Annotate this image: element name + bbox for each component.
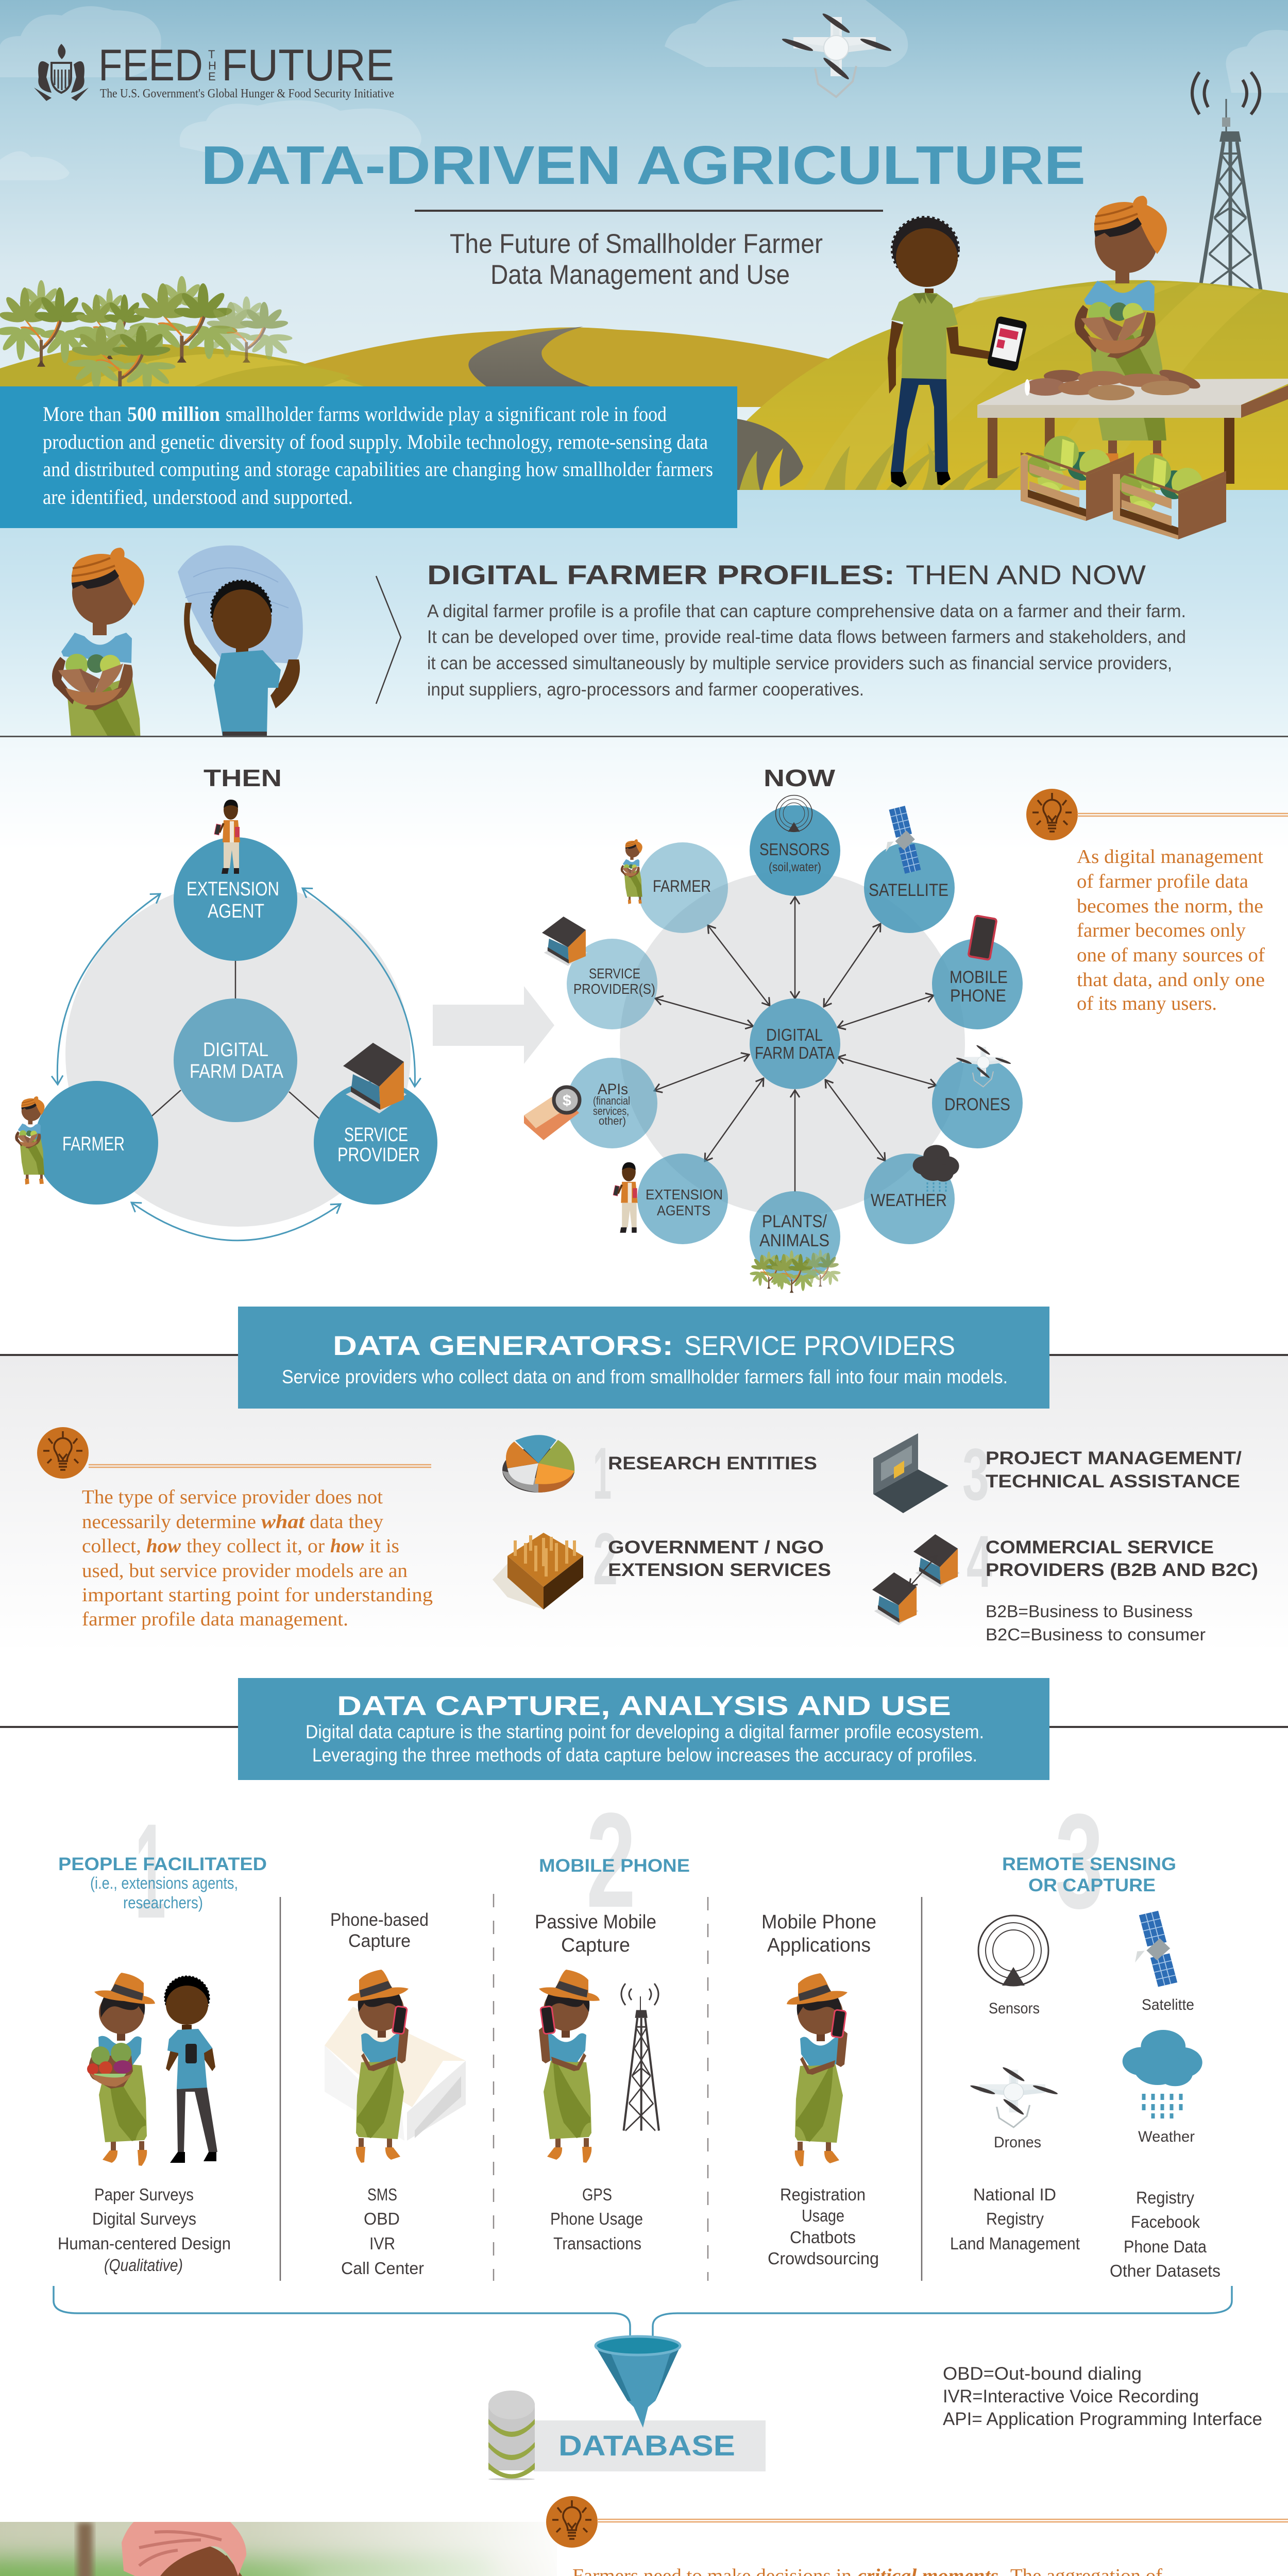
node: extension agent: AGENT bbox=[208, 901, 264, 922]
icon: sensors bbox=[978, 1916, 1048, 2017]
wordmark: FUTURE bbox=[222, 41, 394, 90]
node: satellite bbox=[864, 805, 955, 933]
list: remote sensing one: Registry bbox=[986, 2209, 1044, 2228]
banner: data capture: Leveraging the three methods of data capture below increases the accuracy of profiles. bbox=[312, 1744, 977, 1766]
text: abbreviations: API= Application Programming Interface bbox=[943, 2409, 1262, 2429]
node: digital farm data bbox=[174, 998, 297, 1122]
callout: type of service provider: farmer profile data management. bbox=[82, 1608, 348, 1630]
list: passive mobile capture: Transactions bbox=[553, 2234, 641, 2253]
node: farmer: FARMER bbox=[62, 1133, 125, 1155]
node: APIs: services, bbox=[593, 1105, 629, 1117]
panel: now diagram bbox=[524, 765, 1023, 1293]
subtitle: The Future of Smallholder Farmer bbox=[450, 229, 823, 259]
list: remote sensing two: Facebook bbox=[1131, 2212, 1200, 2231]
icon: drone bbox=[781, 12, 892, 97]
list: people facilitated: Paper Surveys bbox=[94, 2185, 194, 2204]
big numerals: 2 bbox=[586, 1785, 636, 1936]
list: passive mobile capture: GPS bbox=[582, 2185, 612, 2204]
node: sensors: (soil,water) bbox=[769, 860, 821, 874]
icon: light bulb bbox=[1026, 789, 1078, 840]
icon: funnel bbox=[596, 2336, 680, 2428]
column dividers bbox=[280, 1894, 922, 2281]
text: digital farmer profile definition: A digital farmer profile is a profile that can capture comprehensive data on a farmer and their farm. bbox=[427, 601, 1186, 621]
icon: weather: Weather bbox=[1138, 2128, 1195, 2145]
list: mobile phone applications: Crowdsourcing bbox=[768, 2249, 879, 2268]
node: drones bbox=[932, 1044, 1023, 1148]
item: commercial service providers: B2B=Business to Business bbox=[986, 1602, 1193, 1621]
node: extension agents: EXTENSION bbox=[646, 1187, 723, 1202]
node: extension agents: AGENTS bbox=[657, 1202, 710, 1218]
list: remote sensing two bbox=[1110, 2188, 1221, 2280]
panel: intro text: production and genetic diversity of food supply. Mobile technology, remote-sensing data bbox=[43, 430, 708, 453]
heading: now: NOW bbox=[764, 765, 836, 791]
node: mobile phone: MOBILE bbox=[950, 968, 1008, 987]
panel: intro text bbox=[0, 386, 737, 528]
list: phone-based capture: SMS bbox=[367, 2185, 397, 2204]
subheads: Phone-based bbox=[330, 1910, 429, 1930]
text: abbreviations: OBD=Out-bound dialing bbox=[943, 2364, 1142, 2384]
column heading: people facilitated: (i.e., extensions agents, bbox=[90, 1874, 238, 1892]
column heading: people facilitated: researchers) bbox=[123, 1893, 203, 1912]
database panel: DATABASE bbox=[558, 2429, 735, 2462]
list: phone-based capture: OBD bbox=[364, 2209, 400, 2228]
item: government ngo extension: 2 bbox=[593, 1518, 618, 1600]
chevron bbox=[376, 576, 401, 704]
item: government ngo extension: EXTENSION SERVICES bbox=[608, 1560, 831, 1580]
icon: satellite: Satelitte bbox=[1142, 1996, 1194, 2013]
crates of cabbages bbox=[1021, 436, 1226, 539]
callout: farmer as one source: of farmer profile data bbox=[1077, 871, 1248, 892]
item: project management bbox=[873, 1433, 1242, 1516]
text: digital farmer profile definition: It can be developed over time, provide real-time data flows between farmers and stakeholders, and bbox=[427, 627, 1186, 647]
callout: farmer as one source bbox=[1026, 789, 1288, 1014]
photo: woman in field bbox=[0, 2522, 547, 2576]
subheads: Applications bbox=[767, 1935, 871, 1956]
item: commercial service providers: B2C=Business to consumer bbox=[986, 1625, 1206, 1644]
list: people facilitated: (Qualitative) bbox=[104, 2256, 183, 2275]
list: remote sensing one bbox=[950, 2185, 1080, 2253]
item: research entities bbox=[502, 1433, 817, 1515]
icon: satellite bbox=[1123, 1910, 1194, 2013]
item: project management: TECHNICAL ASSISTANCE bbox=[986, 1471, 1240, 1492]
list: remote sensing one: Land Management bbox=[950, 2234, 1080, 2253]
node: digital farm data: DIGITAL bbox=[203, 1039, 268, 1061]
node: APIs: other) bbox=[599, 1114, 626, 1127]
icon: light bulb bbox=[546, 2496, 598, 2548]
node: sensors: SENSORS bbox=[759, 840, 829, 859]
big numerals bbox=[135, 1785, 1104, 1946]
subheads: Capture bbox=[561, 1935, 630, 1956]
title rule bbox=[415, 210, 883, 212]
background: hero sky bbox=[0, 0, 1288, 495]
node: plants animals: ANIMALS bbox=[759, 1231, 829, 1250]
illustration: man with phone bbox=[888, 217, 1027, 487]
callout: farmer as one source: As digital management bbox=[1077, 846, 1263, 868]
illustration: woman with produce basket bbox=[87, 1973, 155, 2166]
item: government ngo extension bbox=[493, 1518, 831, 1609]
list: people facilitated bbox=[58, 2185, 231, 2275]
list: phone-based capture: IVR bbox=[369, 2234, 395, 2253]
arrow: then to now bbox=[433, 986, 554, 1064]
wordmark: FEED bbox=[98, 41, 203, 90]
list: mobile phone applications: Usage bbox=[802, 2206, 844, 2225]
cycle arrows bbox=[57, 876, 416, 1241]
heading: digital farmer profiles: DIGITAL FARMER PROFILES: bbox=[427, 560, 895, 590]
list: people facilitated: Digital Surveys bbox=[92, 2209, 196, 2228]
subheads: Mobile Phone bbox=[761, 1911, 876, 1933]
list: passive mobile capture bbox=[550, 2185, 643, 2253]
text: digital farmer profile definition: input suppliers, agro-processors and farmer cooperatives. bbox=[427, 680, 864, 700]
panel: intro text: smallholder farms worldwide play a significant role in food bbox=[226, 402, 667, 426]
node: weather bbox=[864, 1145, 959, 1244]
icon: cell tower bbox=[1192, 72, 1261, 290]
subtitle: Data Management and Use bbox=[490, 260, 790, 290]
column heading: remote sensing: REMOTE SENSING bbox=[1002, 1854, 1176, 1874]
icon: pie chart bbox=[502, 1435, 574, 1493]
callout: farmer as one source: farmer becomes only bbox=[1077, 920, 1246, 941]
clouds bbox=[0, 0, 1288, 180]
node: APIs bbox=[524, 1058, 657, 1148]
item: project management: PROJECT MANAGEMENT/ bbox=[986, 1448, 1242, 1468]
column heading: mobile phone: MOBILE PHONE bbox=[539, 1856, 690, 1876]
text: abbreviations bbox=[943, 2364, 1262, 2429]
section rule bbox=[0, 1726, 1288, 1728]
background: then and now section bbox=[0, 737, 1288, 851]
node: digital farm data: FARM DATA bbox=[755, 1043, 835, 1062]
background: service providers section bbox=[0, 1356, 1288, 1727]
icon: light bulb bbox=[37, 1427, 89, 1479]
column heading: remote sensing: OR CAPTURE bbox=[1028, 1875, 1156, 1895]
banner: data generators: SERVICE PROVIDERS bbox=[684, 1331, 955, 1361]
list: remote sensing two: Other Datasets bbox=[1110, 2261, 1221, 2280]
callout: type of service provider: how bbox=[330, 1535, 364, 1557]
node: APIs: APIs bbox=[598, 1081, 628, 1098]
icon: sensors: Sensors bbox=[989, 2000, 1040, 2017]
hills and road bbox=[0, 280, 1288, 490]
banner: data capture bbox=[238, 1678, 1049, 1780]
node: service provider bbox=[314, 1043, 437, 1205]
column heading: people facilitated: PEOPLE FACILITATED bbox=[58, 1854, 267, 1874]
callout: type of service provider: how bbox=[146, 1535, 181, 1557]
wordmark: H bbox=[208, 59, 216, 72]
node: sensors bbox=[750, 795, 840, 896]
item: commercial service providers: PROVIDERS (B2B AND B2C) bbox=[986, 1560, 1258, 1580]
illustration: woman on phone col 2 bbox=[348, 1970, 409, 2163]
list: mobile phone applications: Chatbots bbox=[790, 2228, 856, 2247]
trees bbox=[0, 276, 293, 394]
icon: drone: Drones bbox=[994, 2134, 1041, 2151]
node: extension agent bbox=[174, 800, 297, 961]
item: commercial service providers: 4 bbox=[967, 1521, 992, 1603]
callout: farmer as one source: one of many sources of bbox=[1077, 944, 1265, 966]
item: research entities: RESEARCH ENTITIES bbox=[608, 1453, 817, 1473]
node: extension agents bbox=[613, 1154, 728, 1244]
subheads bbox=[330, 1910, 876, 1956]
node: farmer bbox=[15, 1081, 158, 1205]
illustration: man with phone col 1 bbox=[165, 1976, 217, 2163]
panel: intro text: and distributed computing and storage capabilities are changing how smallholder farmers bbox=[43, 457, 713, 481]
table bbox=[977, 379, 1288, 484]
heading: then: THEN bbox=[204, 765, 282, 791]
callout: type of service provider: The type of service provider does not bbox=[82, 1486, 383, 1508]
text: digital farmer profile definition: it can be accessed simultaneously by multiple service providers such as financial service providers, bbox=[427, 653, 1172, 673]
icon: US seal eagle bbox=[34, 44, 89, 101]
node: service provider: SERVICE bbox=[344, 1124, 408, 1146]
heading: digital farmer profiles: THEN AND NOW bbox=[906, 560, 1146, 590]
item: commercial service providers bbox=[872, 1521, 1258, 1644]
text: digital farmer profile definition bbox=[427, 601, 1186, 700]
sweet potatoes bbox=[1025, 366, 1202, 400]
callout: type of service provider: important starting point for understanding bbox=[82, 1584, 433, 1606]
banner: data capture: Digital data capture is the starting point for developing a digital farmer profile ecosystem. bbox=[306, 1721, 984, 1742]
node: digital farm data: DIGITAL bbox=[766, 1025, 823, 1044]
illustration: woman with basket bbox=[1075, 196, 1167, 471]
list: remote sensing two: Phone Data bbox=[1124, 2237, 1207, 2256]
callout: farmer as one source: that data, and only one bbox=[1077, 969, 1265, 991]
text: abbreviations: IVR=Interactive Voice Recording bbox=[943, 2386, 1199, 2406]
node: service provider: PROVIDER bbox=[337, 1144, 420, 1166]
list: mobile phone applications: Registration bbox=[780, 2185, 866, 2204]
list: remote sensing two: Registry bbox=[1136, 2188, 1194, 2207]
panel: intro text: 500 million bbox=[127, 402, 220, 426]
callout: farmer as one source: of its many users. bbox=[1077, 993, 1217, 1014]
section rule bbox=[0, 736, 1288, 737]
callout: type of service provider: what bbox=[261, 1511, 306, 1533]
subtitle bbox=[450, 229, 823, 290]
node: plants animals bbox=[750, 1191, 841, 1293]
illustration: woman on phone col 4 bbox=[787, 1973, 848, 2166]
column heading: remote sensing bbox=[1002, 1854, 1176, 1895]
node: satellite: SATELLITE bbox=[869, 880, 948, 900]
logo: Feed the Future bbox=[34, 41, 394, 101]
node: mobile phone: PHONE bbox=[950, 986, 1006, 1006]
wordmark: T bbox=[208, 48, 215, 61]
callout: type of service provider: collect, bbox=[82, 1535, 141, 1557]
item: research entities: 1 bbox=[593, 1433, 612, 1515]
big numerals: 3 bbox=[1055, 1786, 1104, 1937]
column heading: people facilitated bbox=[58, 1854, 267, 1912]
icon: wheat field bbox=[493, 1533, 583, 1609]
spokes bbox=[654, 897, 936, 1192]
icon: drone bbox=[970, 2066, 1058, 2151]
background circle bbox=[65, 882, 411, 1227]
grass bbox=[739, 440, 1020, 490]
database panel bbox=[488, 2391, 766, 2480]
illustration: farmer profile man with data cloud bbox=[178, 546, 303, 736]
illustration: farmer profile woman bbox=[52, 548, 144, 736]
callout: type of service provider: they collect it, or bbox=[187, 1535, 325, 1557]
banner: data generators: DATA GENERATORS: bbox=[333, 1331, 673, 1361]
bracket bbox=[54, 2286, 1232, 2339]
callout: type of service provider: used, but service provider models are an bbox=[82, 1560, 408, 1582]
illustration: call center building bbox=[325, 2007, 466, 2141]
icon: laptop bbox=[873, 1433, 948, 1513]
icon: weather bbox=[1123, 2030, 1202, 2145]
callout: type of service provider: data they bbox=[310, 1511, 383, 1533]
subheads: Passive Mobile bbox=[535, 1911, 656, 1933]
node: digital farm data: FARM DATA bbox=[190, 1061, 284, 1082]
icon: cell tower col 3 bbox=[621, 1984, 659, 2131]
node: service providers: PROVIDER(S) bbox=[573, 981, 655, 997]
icon: two houses bbox=[872, 1534, 960, 1625]
item: government ngo extension: GOVERNMENT / NGO bbox=[608, 1537, 824, 1557]
node: farmer: FARMER bbox=[653, 877, 711, 895]
list: phone-based capture: Call Center bbox=[341, 2259, 424, 2278]
panel: intro text: are identified, understood and supported. bbox=[43, 485, 353, 509]
panel: intro text: More than bbox=[43, 402, 122, 426]
list: remote sensing one: National ID bbox=[973, 2185, 1056, 2204]
node: weather: WEATHER bbox=[871, 1191, 947, 1210]
node: APIs: (financial bbox=[593, 1094, 630, 1107]
callout: critical moments bbox=[546, 2496, 1288, 2576]
heading: digital farmer profiles bbox=[427, 560, 1146, 590]
list: phone-based capture bbox=[341, 2185, 424, 2278]
node: service providers: SERVICE bbox=[589, 965, 640, 981]
wordmark bbox=[98, 41, 394, 90]
callout: type of service provider bbox=[37, 1427, 433, 1630]
node: drones: DRONES bbox=[944, 1095, 1010, 1114]
callout: type of service provider: it is bbox=[369, 1535, 399, 1557]
title: DATA-DRIVEN AGRICULTURE bbox=[201, 135, 1086, 196]
node: plants animals: PLANTS/ bbox=[762, 1212, 827, 1231]
list: mobile phone applications bbox=[768, 2185, 879, 2268]
item: project management: 3 bbox=[962, 1434, 989, 1516]
node: service providers bbox=[542, 917, 657, 1029]
tagline: The U.S. Government's Global Hunger & Food Security Initiative bbox=[100, 87, 394, 100]
node: digital farm data bbox=[750, 998, 840, 1089]
list: passive mobile capture: Phone Usage bbox=[550, 2209, 643, 2228]
node: APIs: $ bbox=[563, 1092, 571, 1109]
node: extension agent: EXTENSION bbox=[187, 878, 279, 900]
connectors bbox=[148, 961, 322, 1121]
banner: data generators bbox=[238, 1307, 1049, 1409]
banner: data capture: DATA CAPTURE, ANALYSIS AND USE bbox=[337, 1691, 951, 1721]
banner: data generators: Service providers who collect data on and from smallholder farmers fall into four main models. bbox=[282, 1366, 1008, 1387]
list: people facilitated: Human-centered Design bbox=[58, 2234, 231, 2253]
big numerals: 1 bbox=[135, 1795, 166, 1946]
icon: database cylinders bbox=[488, 2391, 535, 2480]
callout: farmer as one source: becomes the norm, the bbox=[1077, 895, 1263, 917]
callout: type of service provider: necessarily determine bbox=[82, 1511, 256, 1533]
wordmark: E bbox=[208, 70, 216, 83]
subheads: Capture bbox=[348, 1931, 411, 1951]
node: mobile phone bbox=[932, 916, 1023, 1029]
illustration: woman on phone col 3 bbox=[539, 1970, 600, 2163]
item: commercial service providers: COMMERCIAL SERVICE bbox=[986, 1537, 1214, 1557]
section rule bbox=[0, 1354, 1288, 1356]
node: farmer bbox=[621, 839, 728, 933]
background: hero ground bbox=[0, 490, 1288, 736]
panel: then diagram bbox=[15, 765, 437, 1241]
background circle bbox=[620, 871, 965, 1216]
